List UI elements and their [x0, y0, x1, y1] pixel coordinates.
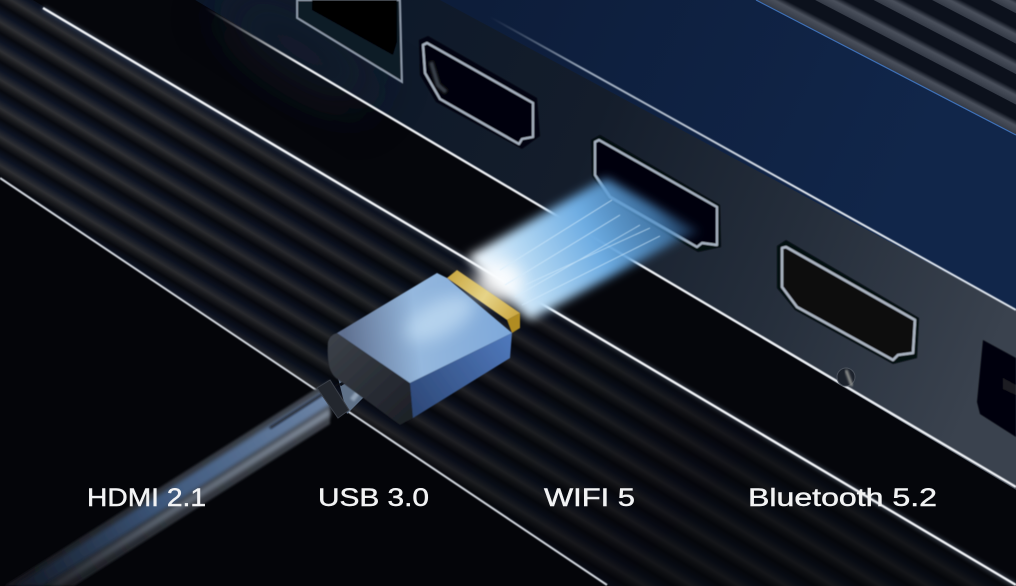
data beam of light — [467, 178, 700, 320]
icon: small screw bump — [837, 368, 855, 386]
label: USB 3.0: USB 3.0 — [318, 484, 429, 512]
beam: light glow at plug tip — [474, 262, 522, 302]
label: WIFI 5: WIFI 5 — [544, 484, 635, 512]
plug: glowing top face — [337, 273, 512, 383]
line: device top edge — [490, 17, 1016, 310]
line: device lower edge — [205, 8, 1016, 487]
beam: light streaks — [500, 200, 660, 305]
plug: blue side face — [410, 333, 512, 418]
plug: gold contact top — [447, 270, 520, 320]
panel: navy device top — [420, 0, 1016, 310]
label: HDMI 2.1: HDMI 2.1 — [87, 484, 206, 512]
icon: right edge port — [977, 340, 1016, 437]
HDMI plug connector — [328, 270, 520, 425]
cable — [4, 360, 377, 586]
plug: grey end cap — [328, 333, 413, 425]
icon: HDMI port 3 — [777, 240, 919, 364]
feature labels — [87, 484, 937, 512]
label: Bluetooth 5.2: Bluetooth 5.2 — [748, 484, 937, 512]
plug: gold contact tip — [507, 313, 520, 333]
line: heat-sink lower edge — [0, 178, 607, 585]
panel: device port face — [195, 0, 1016, 490]
icon: HDMI port 2 receiving signal — [591, 135, 721, 252]
cable: tapered strain relief — [338, 360, 377, 414]
cable: collar ring — [317, 380, 349, 418]
icon: HDMI port 1 — [419, 36, 540, 149]
plug: top-face glow — [398, 285, 482, 351]
icon: ethernet port — [297, 0, 402, 82]
line: vent blue edge — [756, 0, 1016, 135]
panel: striped top-right vent — [756, 0, 1016, 135]
